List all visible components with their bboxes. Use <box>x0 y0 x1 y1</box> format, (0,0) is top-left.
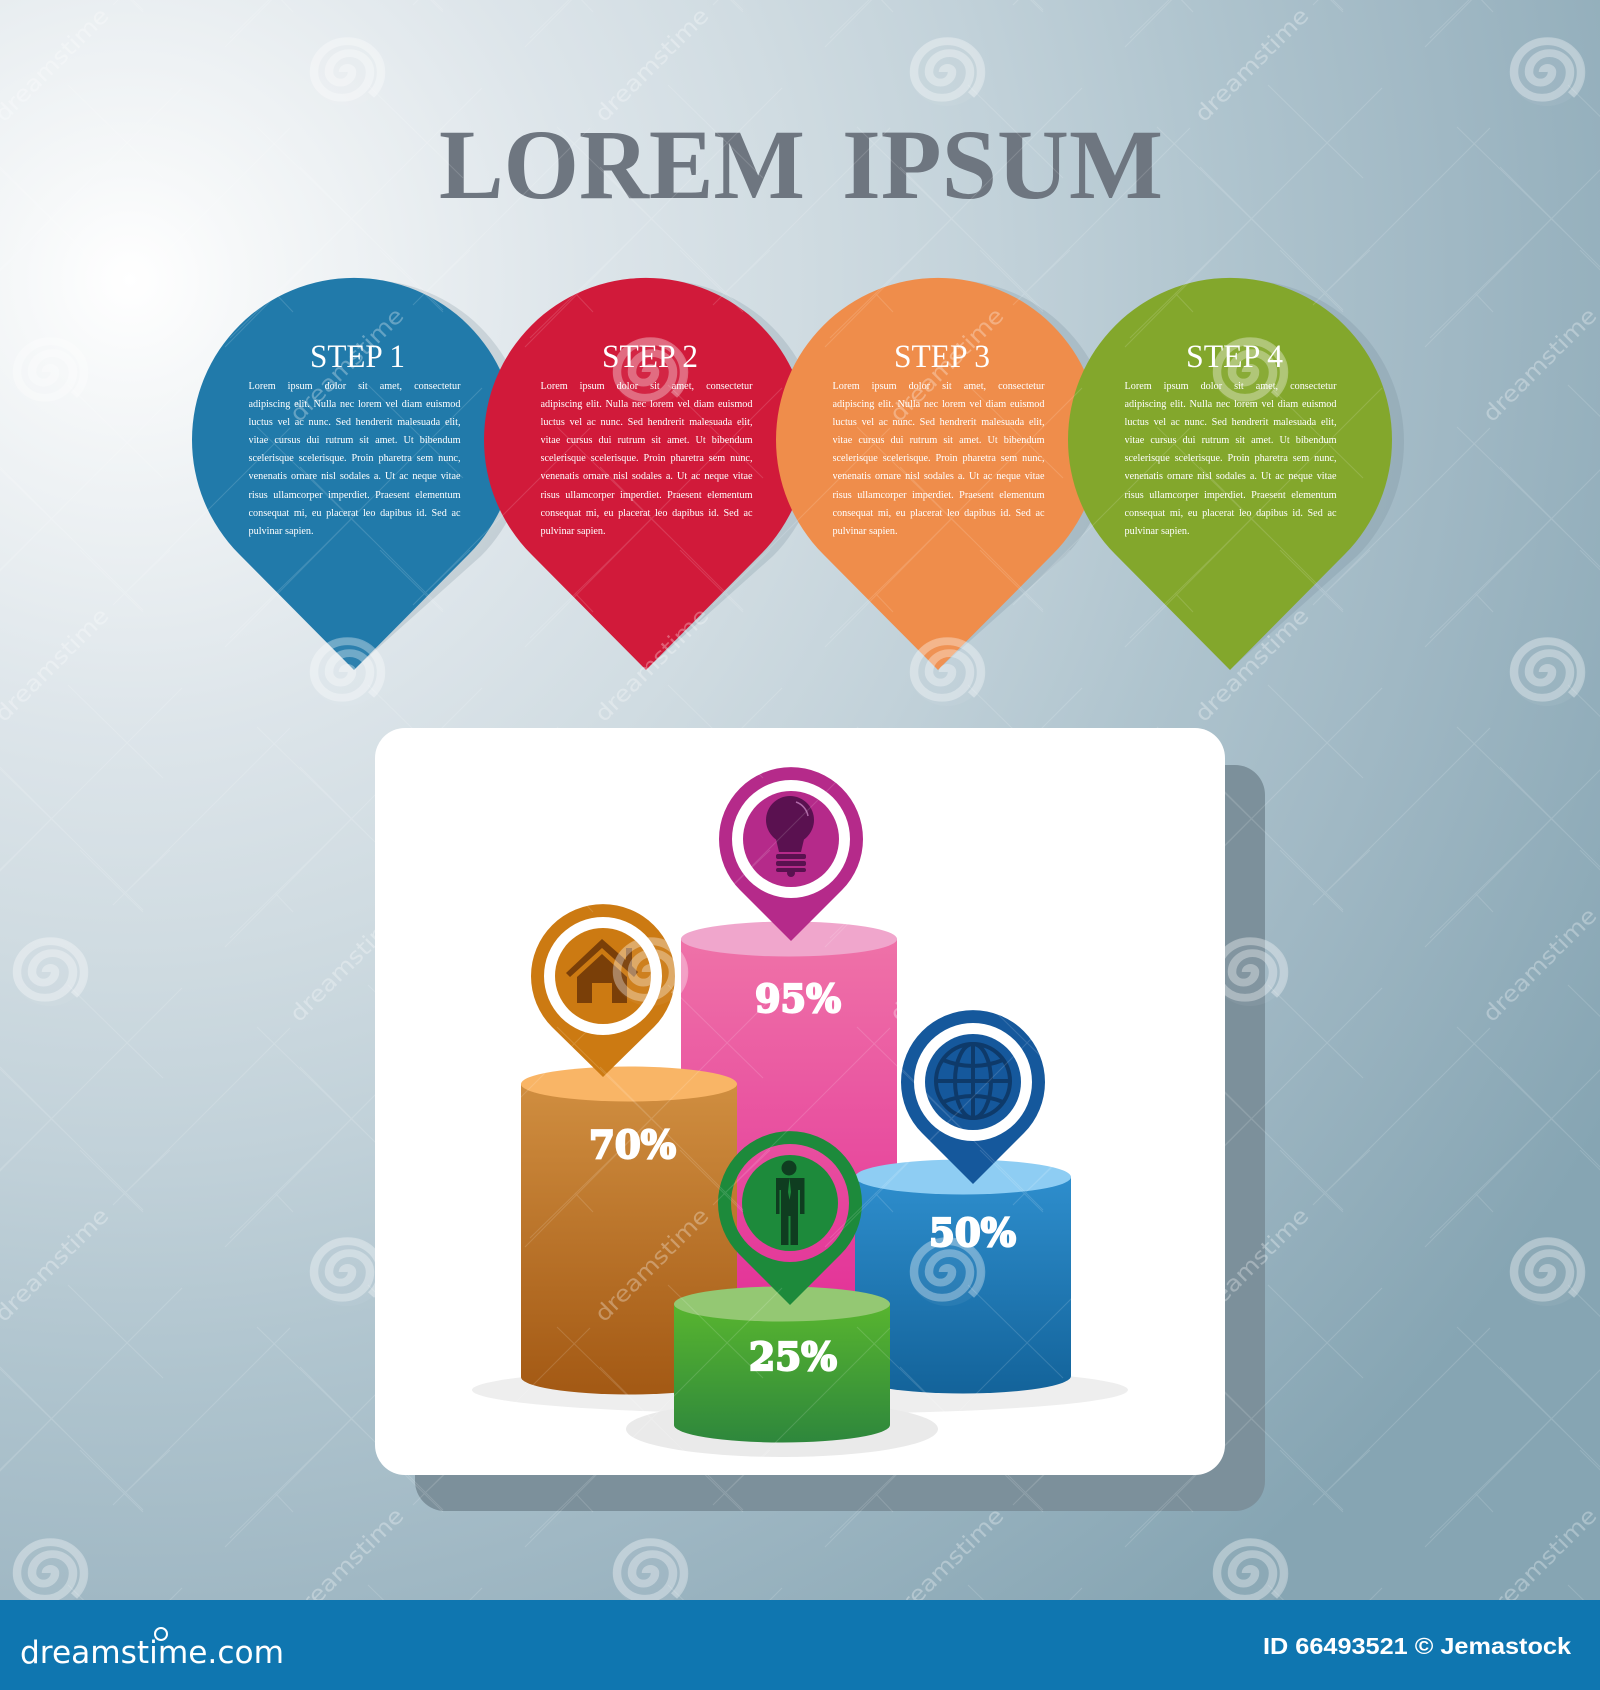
watermark: diagonal text: dreamstime <box>1479 304 1600 427</box>
text block: step 4: venenatis ornare nisl sodales a. Ut ac neque vitae <box>1124 471 1336 482</box>
title: LOREM <box>439 109 805 220</box>
text block: step 1: risus ullamcorper imperdiet. Praesent elementum <box>248 490 460 501</box>
text block: step 3: scelerisque scelerisque. Proin pharetra sem nunc, <box>832 453 1044 464</box>
footer logo: dreamstime.com <box>20 1635 284 1671</box>
text block: step 3: venenatis ornare nisl sodales a. Ut ac neque vitae <box>832 471 1044 482</box>
text block: step 3: pulvinar sapien. <box>832 526 898 537</box>
pin: house <box>531 904 675 1077</box>
text block: step 1 <box>248 378 462 548</box>
panel: step 1 <box>192 278 528 670</box>
text block: step 1: consequat mi, eu placerat leo dapibus id. Sed ac <box>248 508 460 519</box>
panel: step 2 <box>484 278 820 670</box>
pin: person <box>718 1131 862 1305</box>
watermark: diagonal text: dreamstime <box>1479 904 1600 1027</box>
bar: pink 95% <box>681 922 897 1327</box>
text block: step 4: risus ullamcorper imperdiet. Praesent elementum <box>1124 490 1336 501</box>
title: IPSUM <box>842 109 1163 220</box>
panel: step 4 <box>1068 278 1404 670</box>
text block: step 2: Lorem ipsum dolor sit amet, consectetur <box>540 381 752 392</box>
watermark: diagonal text: dreamstime <box>286 904 409 1027</box>
watermark: diagonal text: dreamstime <box>1479 1504 1600 1627</box>
watermark: diagonal text: dreamstime <box>886 904 1009 1027</box>
text block: step 2 <box>540 378 754 548</box>
text block: step 1: venenatis ornare nisl sodales a. Ut ac neque vitae <box>248 471 460 482</box>
text block: step 4: pulvinar sapien. <box>1124 526 1190 537</box>
text block: step 1: adipiscing elit. Nulla nec lorem vel diam euismod <box>248 399 460 410</box>
text block: step 1: vitae cursus dui rutrum sit amet. Ut bibendum <box>248 435 460 446</box>
pin: globe <box>901 1010 1045 1184</box>
watermark: diagonal text: dreamstime <box>286 304 409 427</box>
label: 70%: 70% <box>589 1122 676 1167</box>
icon: globe <box>936 1044 1010 1118</box>
text block: step 1: pulvinar sapien. <box>248 526 314 537</box>
text block: step 1: luctus vel ac nunc. Sed hendrerit malesuada elit, <box>248 417 460 428</box>
label: 95%: 95% <box>755 976 841 1021</box>
heading: step 1: STEP 1 <box>310 339 405 375</box>
text block: step 2: luctus vel ac nunc. Sed hendrerit malesuada elit, <box>540 417 752 428</box>
watermark: diagonal text: dreamstime <box>591 604 714 727</box>
heading: step 4: STEP 4 <box>1186 339 1283 375</box>
icon: house <box>566 939 638 1003</box>
text block: step 4: Lorem ipsum dolor sit amet, consectetur <box>1124 381 1336 392</box>
text block: step 4: scelerisque scelerisque. Proin pharetra sem nunc, <box>1124 453 1336 464</box>
panel: step 3 <box>776 278 1112 670</box>
footer credit: ID 66493521 © Jemastock <box>1263 1633 1571 1659</box>
text block: step 3: vitae cursus dui rutrum sit amet. Ut bibendum <box>832 435 1044 446</box>
icon: lightbulb <box>766 796 814 877</box>
text block: step 4: adipiscing elit. Nulla nec lorem vel diam euismod <box>1124 399 1336 410</box>
text block: step 3 <box>832 378 1046 548</box>
card shadow <box>415 765 1265 1511</box>
text block: step 2: scelerisque scelerisque. Proin pharetra sem nunc, <box>540 453 752 464</box>
text block: step 4: consequat mi, eu placerat leo dapibus id. Sed ac <box>1124 508 1336 519</box>
bar: blue 50% <box>855 1160 1071 1394</box>
text block: step 3: Lorem ipsum dolor sit amet, consectetur <box>832 381 1044 392</box>
watermark: diagonal text: dreamstime <box>1191 604 1314 727</box>
title <box>439 109 1163 220</box>
text block: step 3: risus ullamcorper imperdiet. Praesent elementum <box>832 490 1044 501</box>
watermark: diagonal text: dreamstime <box>886 1504 1009 1627</box>
bar: orange 70% <box>521 1066 737 1394</box>
text block: step 3: adipiscing elit. Nulla nec lorem vel diam euismod <box>832 399 1044 410</box>
floor shadow: back cylinders <box>472 1366 1128 1414</box>
label: 50%: 50% <box>929 1210 1016 1255</box>
text block: step 1: scelerisque scelerisque. Proin pharetra sem nunc, <box>248 453 460 464</box>
text block: step 2: venenatis ornare nisl sodales a. Ut ac neque vitae <box>540 471 752 482</box>
text block: step 4: luctus vel ac nunc. Sed hendrerit malesuada elit, <box>1124 417 1336 428</box>
text block: step 3: luctus vel ac nunc. Sed hendrerit malesuada elit, <box>832 417 1044 428</box>
text block: step 4: vitae cursus dui rutrum sit amet. Ut bibendum <box>1124 435 1336 446</box>
chart: cylinder bars <box>472 767 1128 1457</box>
bar: green 25% <box>674 1286 890 1442</box>
watermark: diagonal text: dreamstime <box>1191 1204 1314 1327</box>
watermark: diagonal text: dreamstime <box>591 1204 714 1327</box>
text block: step 4 <box>1124 378 1338 548</box>
text block: step 1: Lorem ipsum dolor sit amet, consectetur <box>248 381 460 392</box>
watermark: diagonal text: dreamstime <box>591 4 714 127</box>
text block: step 2: risus ullamcorper imperdiet. Praesent elementum <box>540 490 752 501</box>
panel: white chart card <box>375 728 1225 1475</box>
floor shadow: front cylinder <box>626 1401 938 1457</box>
watermark: diagonal text: dreamstime <box>286 1504 409 1627</box>
heading: step 2: STEP 2 <box>602 339 698 375</box>
label: 25%: 25% <box>749 1334 837 1379</box>
text block: step 2: vitae cursus dui rutrum sit amet. Ut bibendum <box>540 435 752 446</box>
text block: step 3: consequat mi, eu placerat leo dapibus id. Sed ac <box>832 508 1044 519</box>
text block: step 2: consequat mi, eu placerat leo dapibus id. Sed ac <box>540 508 752 519</box>
pin: lightbulb <box>719 767 863 941</box>
icon: person <box>776 1160 804 1245</box>
watermark: diagonal text: dreamstime <box>886 304 1009 427</box>
watermark: diagonal text: dreamstime <box>1191 4 1314 127</box>
footer bar <box>0 1600 1600 1690</box>
heading: step 3: STEP 3 <box>894 339 990 375</box>
text block: step 2: adipiscing elit. Nulla nec lorem vel diam euismod <box>540 399 752 410</box>
text block: step 2: pulvinar sapien. <box>540 526 606 537</box>
